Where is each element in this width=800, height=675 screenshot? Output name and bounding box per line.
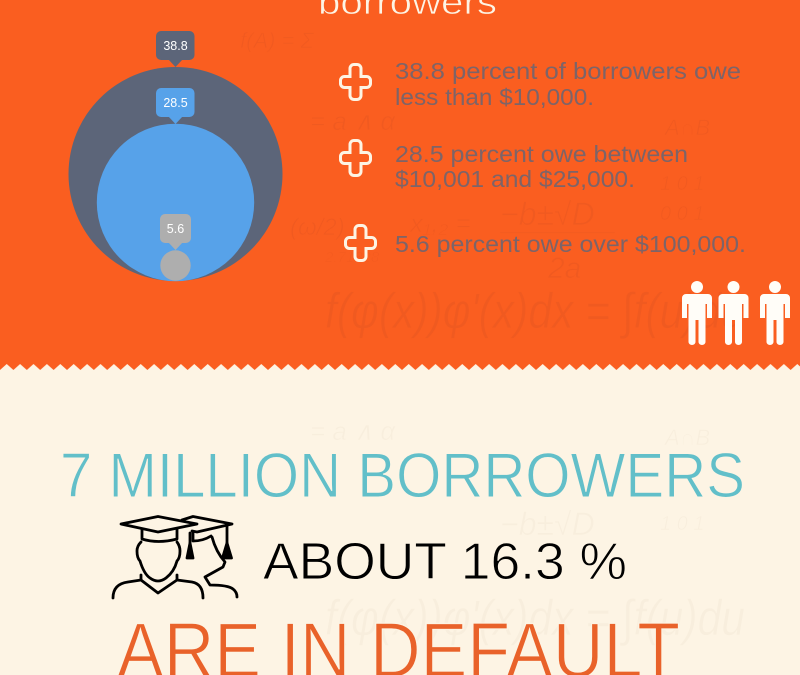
math doodle background: cream: −b±√D <box>500 506 595 542</box>
icon: three people <box>682 281 790 345</box>
circle: 38.8 percent <box>68 67 282 281</box>
panel: orange upper section <box>0 0 800 372</box>
math doodle background: orange: −b±√D <box>500 196 595 232</box>
math doodle background: orange: (ω/2) <box>290 214 345 241</box>
text block: 38.8 percent <box>395 58 741 110</box>
text block: 38.8 percent: 38.8 percent of borrowers owe <box>395 58 741 84</box>
tooltip: 28.5: 28.5 <box>163 96 188 110</box>
tooltip: 28.5 <box>156 88 194 124</box>
back graduate <box>182 516 237 597</box>
icon: plus 3 <box>346 226 376 260</box>
person 3 <box>760 281 790 345</box>
zigzag divider <box>0 364 800 372</box>
icon: graduates <box>113 516 237 598</box>
math doodle background: cream: A∩B <box>663 425 710 450</box>
math doodle background: orange: 2.71828 <box>324 249 380 266</box>
math doodle background: orange: 0 0 1 <box>660 203 704 225</box>
math doodle background: orange: 2a <box>547 252 581 285</box>
math doodle background: cream: 1 0 1 <box>660 513 704 535</box>
tooltip: 38.8: 38.8 <box>163 39 188 53</box>
math doodle background: orange: = a ∧ α <box>310 106 396 136</box>
text: about 16.3 percent: ABOUT 16.3 % <box>263 533 627 591</box>
text block: 28.5 percent <box>395 141 688 192</box>
circle: 28.5 percent <box>97 124 254 281</box>
text block: 28.5 percent: $10,001 and $25,000. <box>395 166 635 192</box>
math doodle background: orange: x₁,₂ = <box>408 208 471 238</box>
person 1 <box>682 281 712 345</box>
icon: plus 2 <box>340 140 370 176</box>
front graduate <box>113 516 203 598</box>
text block: 28.5 percent: 28.5 percent owe between <box>395 141 688 167</box>
math doodle background: orange: f(A) = Σ <box>240 28 315 53</box>
math doodle background: cream: = a ∧ α <box>310 416 396 446</box>
person 2 <box>718 281 748 345</box>
nested circle chart <box>68 31 282 281</box>
tooltip: 38.8 <box>156 31 194 67</box>
math doodle background: cream <box>310 416 745 647</box>
panel: cream lower section <box>0 370 800 675</box>
text block: 38.8 percent: less than $10,000. <box>395 84 594 110</box>
math doodle background: orange <box>240 28 745 340</box>
text block: 5.6 percent: 5.6 percent owe over $100,000. <box>395 231 746 257</box>
circle: 5.6 percent <box>160 250 191 281</box>
math doodle background: orange: 1 0 1 <box>660 173 704 195</box>
tooltip: 5.6: 5.6 <box>167 222 184 236</box>
tooltip: 5.6 <box>160 214 191 250</box>
math doodle background: orange: A∩B <box>663 115 710 140</box>
heading: 7 million borrowers: 7 MILLION BORROWERS <box>60 441 745 511</box>
icon: plus 1 <box>340 64 370 100</box>
